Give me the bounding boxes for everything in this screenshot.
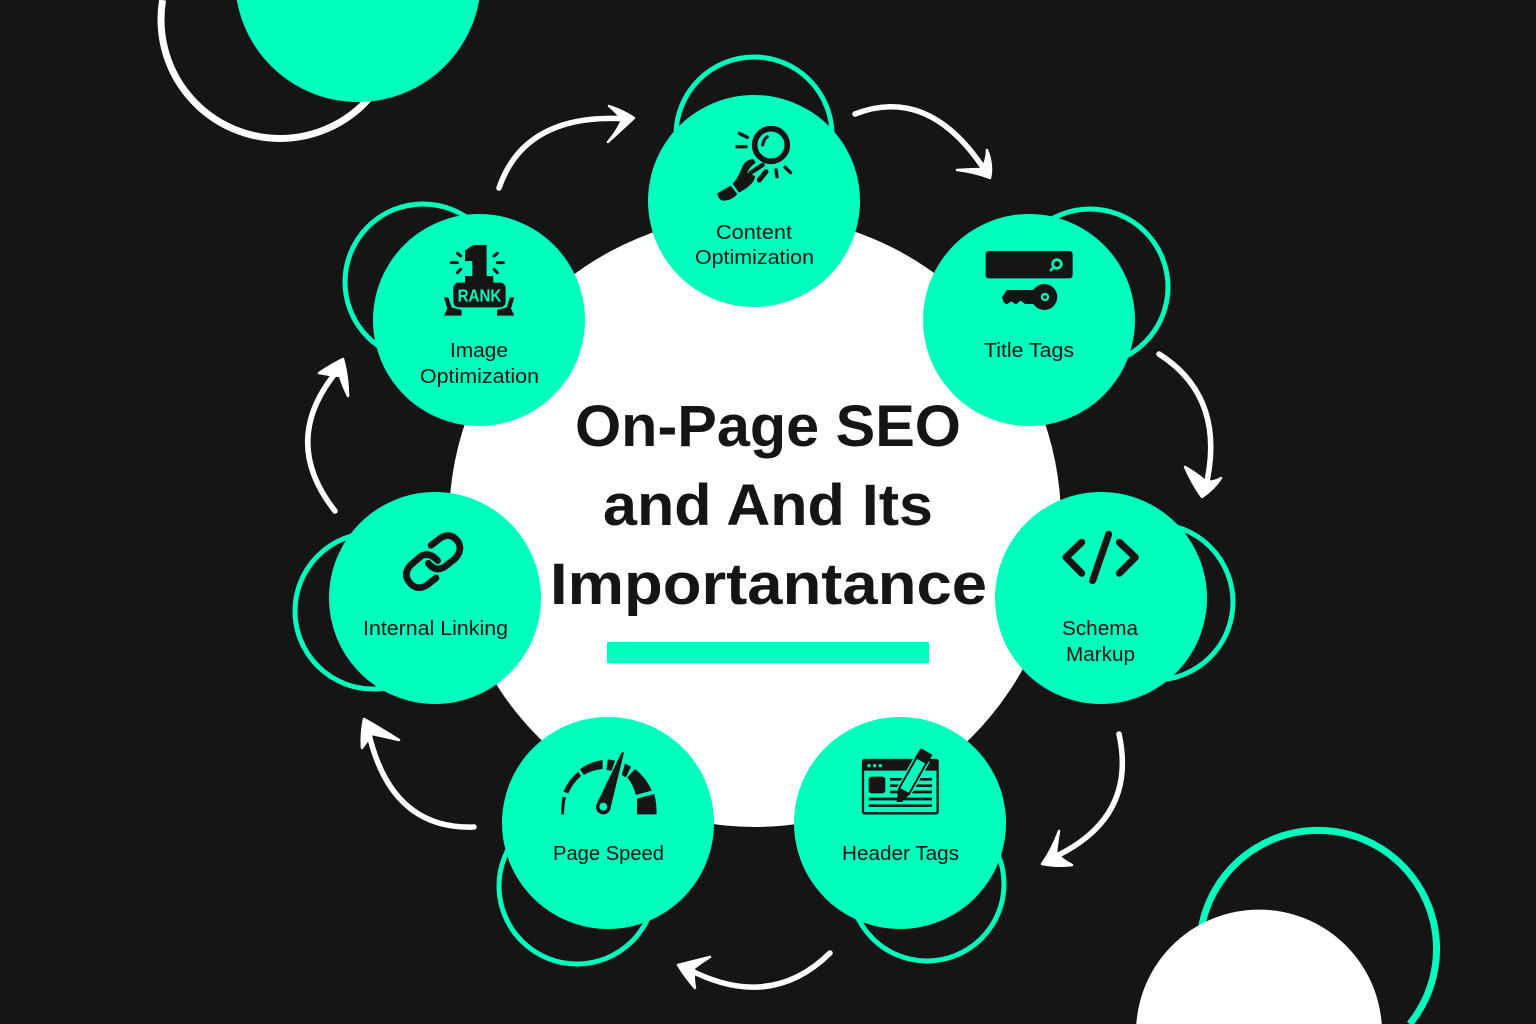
label: Image Optimization: Optimization — [420, 366, 539, 388]
arrow: Page Speed to Internal Linking — [362, 719, 474, 827]
label: Image Optimization — [420, 340, 539, 388]
title: Importantance — [550, 552, 987, 617]
icon: code brackets — [1066, 534, 1135, 581]
title: On-Page SEO — [575, 394, 961, 459]
node: Schema Markup — [995, 492, 1233, 704]
icon: search bar and key — [986, 251, 1073, 310]
arrow: Title Tags to Schema Markup — [1159, 354, 1221, 497]
label: Content Optimization: Optimization — [695, 247, 814, 269]
arrow: Image Optimization to Content Optimization — [499, 106, 634, 188]
icon: rank number one badge — [444, 245, 514, 316]
node: Internal Linking — [295, 492, 541, 704]
icon: speedometer — [561, 752, 657, 814]
node: Image Optimization — [345, 204, 585, 426]
node: Content Optimization — [648, 57, 860, 307]
label: Schema Markup: Markup — [1066, 644, 1135, 666]
label: Content Optimization: Content — [716, 222, 792, 244]
title — [550, 394, 987, 617]
node: Title Tags — [923, 209, 1168, 426]
decoration: top-left ring and circle — [161, 0, 479, 138]
icon: web page with pencil — [863, 750, 938, 813]
label: Content Optimization — [695, 222, 814, 269]
central white circle — [449, 215, 1061, 827]
arrow: Header Tags to Page Speed — [678, 953, 830, 988]
arrow: Content Optimization to Title Tags — [855, 107, 991, 178]
label: Header Tags: Header Tags — [842, 843, 959, 865]
icon: rank number one badge: RANK — [458, 286, 501, 306]
title underline bar — [607, 642, 929, 663]
label: Schema Markup: Schema — [1062, 618, 1139, 640]
node: Header Tags — [794, 717, 1006, 961]
icon: magnifier and hand — [717, 129, 791, 201]
icon: chain link — [406, 536, 460, 588]
title: and And Its — [603, 473, 933, 538]
label: Image Optimization: Image — [450, 340, 508, 362]
label: Internal Linking: Internal Linking — [363, 618, 508, 640]
label: Title Tags: Title Tags — [984, 340, 1074, 362]
arrow: Internal Linking to Image Optimization — [308, 359, 348, 511]
arrow: Schema Markup to Header Tags — [1042, 734, 1122, 866]
label: Schema Markup — [1062, 618, 1139, 666]
label: Page Speed: Page Speed — [553, 843, 664, 865]
node: Page Speed — [499, 717, 714, 964]
decoration: bottom-right ring and circle — [1136, 830, 1437, 1024]
